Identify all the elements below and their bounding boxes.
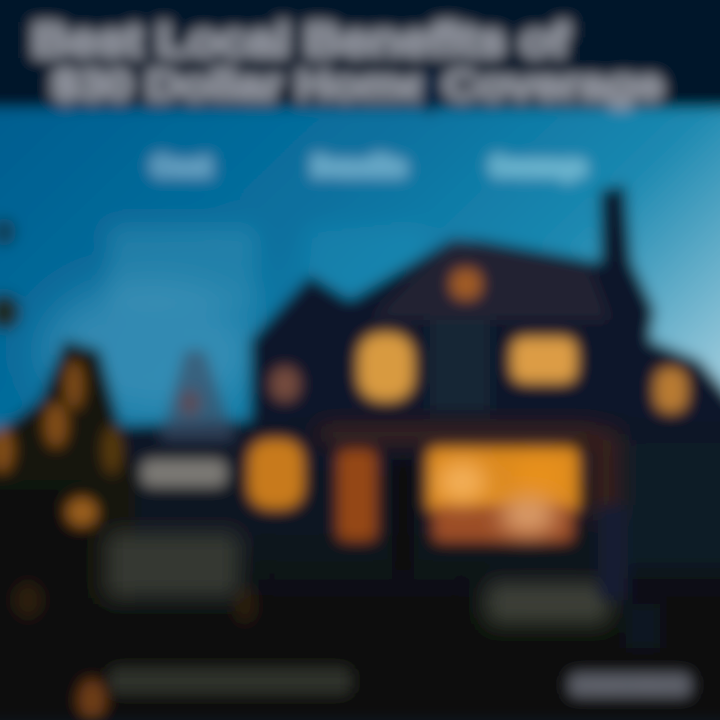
window far left dim [271, 367, 299, 401]
large window lower [434, 505, 572, 541]
window hot spots [438, 457, 568, 534]
house silhouette [0, 185, 720, 720]
house: upper roof [370, 238, 610, 320]
text block: sky middle [305, 225, 425, 295]
blue shadow right [598, 505, 628, 600]
column headings: Cost [152, 151, 210, 181]
text block: sky left [108, 225, 258, 310]
window upper left [359, 334, 413, 400]
right wall tint [620, 440, 720, 570]
door post dark [392, 460, 414, 570]
footer bar right [570, 674, 690, 696]
lower floor right wall [590, 430, 620, 520]
gable window dim [180, 390, 200, 416]
navy patch lower right [626, 604, 660, 648]
dark top-left leaf [0, 294, 20, 330]
footer bar left [110, 668, 350, 694]
dark ground mass [0, 185, 720, 720]
window upper small [451, 269, 481, 299]
lower left window [249, 440, 303, 508]
tree [0, 340, 135, 640]
window upper right [655, 368, 687, 412]
column headings: Benefits [312, 151, 406, 181]
upper windows [180, 269, 687, 416]
footer bar right: Learn More [574, 678, 686, 695]
text block: lower right [486, 582, 610, 624]
column headings: Coverage [490, 151, 586, 181]
door [338, 450, 376, 540]
window upper middle [512, 338, 576, 382]
title notch [420, 70, 440, 114]
tree lights [0, 361, 255, 720]
large window [428, 448, 578, 512]
title [32, 14, 663, 108]
dark left leaf upper [0, 218, 16, 246]
left dark foliage [0, 500, 90, 720]
lower floor glow [320, 428, 620, 520]
side gable [160, 350, 235, 440]
lower windows and door [249, 440, 578, 541]
house: pillar [430, 320, 490, 410]
text block: lower left [106, 532, 240, 598]
sky glow lower [40, 280, 260, 420]
header band [0, 0, 720, 108]
column headings [152, 151, 586, 181]
background sky [0, 100, 720, 520]
label: pale box mid-left [142, 460, 226, 486]
title: $30 Dollar Home Coverage [52, 61, 663, 108]
title: Best Local Benefits of [32, 14, 569, 66]
